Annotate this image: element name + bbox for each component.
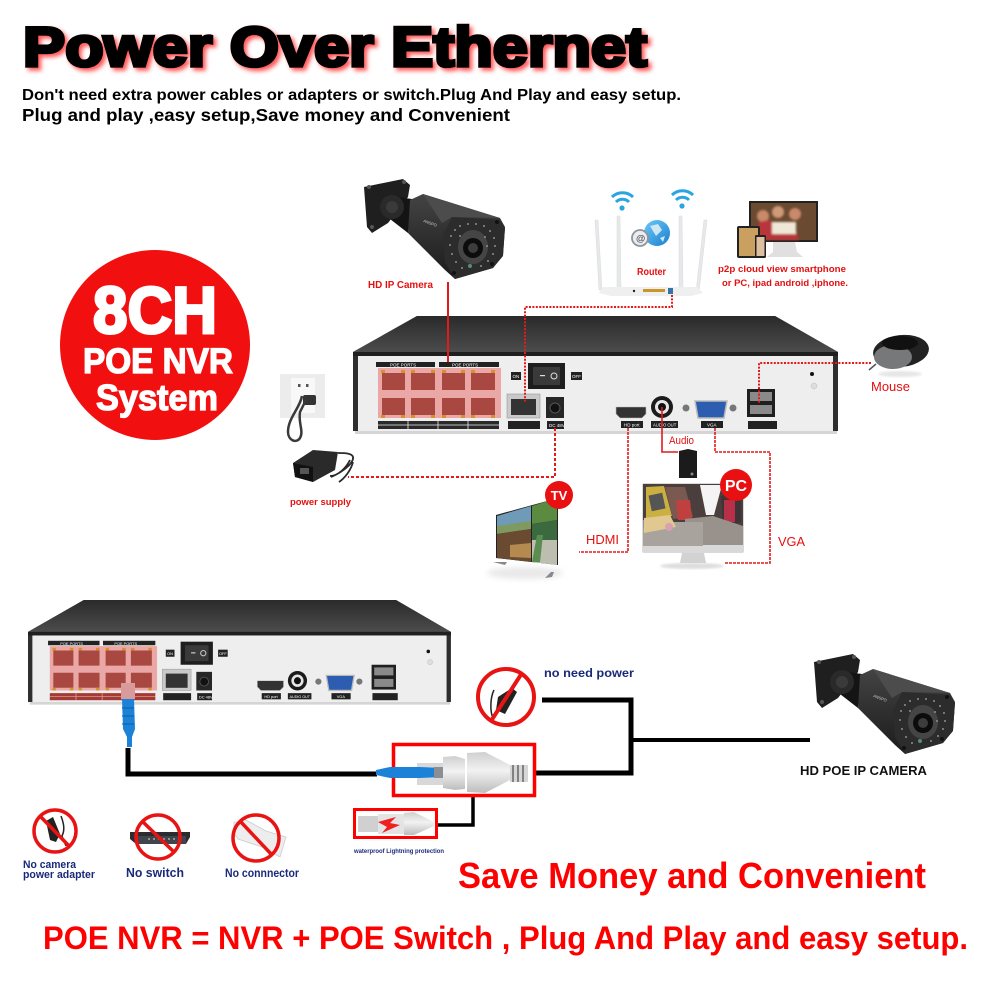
POE ports: POE PORTS bbox=[390, 362, 416, 368]
NVR rear panel: top bbox=[353, 316, 838, 434]
audio port: AUDIO OUT bbox=[653, 422, 677, 428]
icon: HD IP camera bbox=[364, 179, 505, 279]
label: No switch: No switch bbox=[126, 865, 184, 880]
label: p2p cloud text: p2p cloud view smartphone bbox=[718, 264, 846, 275]
power switch bbox=[166, 642, 228, 665]
icon: speaker bbox=[679, 449, 697, 478]
badge: TV bbox=[545, 481, 573, 509]
POE ports: POE PORTS bbox=[452, 362, 478, 368]
LAN port and DC jack: DC 48V bbox=[549, 423, 565, 428]
label: Router: Router bbox=[637, 267, 666, 278]
label: No camera power adapter: No camera bbox=[23, 859, 77, 871]
icon: power adapter bbox=[293, 450, 353, 482]
power switch: ON bbox=[167, 651, 173, 656]
label: power supply: power supply bbox=[290, 497, 352, 508]
USB ports bbox=[372, 665, 398, 700]
HDMI port bbox=[616, 407, 646, 428]
caption: waterproof Lightning protection: waterproof Lightning protection bbox=[353, 849, 444, 855]
VGA port bbox=[682, 401, 736, 428]
badge: 8CH POE NVR System: POE NVR bbox=[83, 342, 233, 381]
label: Mouse: Mouse bbox=[871, 380, 910, 394]
icon: PC monitor bbox=[642, 483, 744, 569]
label: HDMI: HDMI bbox=[586, 532, 619, 547]
icon: HD POE IP camera: ANSPO bbox=[873, 693, 888, 703]
icon: no camera power adapter bbox=[34, 810, 76, 852]
connector lines: red wiring bbox=[348, 282, 871, 563]
icon: mouse bbox=[869, 332, 931, 377]
icon: TV bbox=[487, 498, 563, 579]
power switch: OFF bbox=[219, 651, 227, 656]
subtitle text block: Plug and play ,easy setup,Save money and Convenient bbox=[22, 105, 510, 125]
status LED bbox=[810, 372, 817, 389]
USB ports bbox=[747, 389, 777, 429]
subtitle text block bbox=[22, 87, 681, 125]
blue RJ45 plug in NVR bbox=[121, 683, 135, 747]
audio port: AUDIO OUT bbox=[290, 695, 311, 699]
VGA port: VGA bbox=[337, 694, 345, 699]
badge: TV: TV bbox=[551, 488, 568, 503]
POE ports bbox=[376, 362, 501, 429]
black PoE cable lines bbox=[128, 700, 810, 825]
heading: POE NVR equation: POE NVR = NVR + POE Switch , Plug And Play and easy setup. bbox=[43, 920, 968, 956]
power switch: ON bbox=[512, 374, 519, 379]
power switch bbox=[511, 363, 582, 389]
LAN port and DC jack bbox=[162, 669, 213, 700]
icon: router with wifi bbox=[595, 191, 707, 296]
icon: router with wifi: @ bbox=[636, 234, 645, 244]
title: Power Over Ethernet bbox=[23, 15, 647, 78]
POE ports bbox=[48, 641, 157, 700]
label: No connector: No connnector bbox=[225, 868, 299, 880]
red box: waterproof connector bbox=[376, 744, 534, 796]
heading: Save Money and Convenient: Save Money and Convenient bbox=[458, 855, 926, 896]
power switch: OFF bbox=[572, 374, 581, 379]
label: p2p cloud text bbox=[718, 264, 848, 289]
label: no need power: no need power bbox=[544, 668, 635, 680]
icon: HD POE IP camera bbox=[814, 654, 955, 754]
icon: HD IP camera: ANSPO bbox=[423, 218, 438, 228]
badge: 8CH POE NVR System: 8CH bbox=[93, 273, 217, 347]
label: Audio: Audio bbox=[669, 435, 694, 447]
label: No camera power adapter: power adapter bbox=[23, 869, 96, 881]
LAN port and DC jack: DC 48V bbox=[199, 694, 213, 699]
icon: wall socket and power cable bbox=[280, 374, 325, 441]
VGA port bbox=[315, 675, 362, 699]
HDMI port: HD port bbox=[264, 694, 279, 699]
badge: PC: PC bbox=[725, 478, 748, 495]
red box: lightning protection inset bbox=[354, 810, 436, 838]
label: VGA: VGA bbox=[778, 534, 805, 549]
icon: smartphone, tablet and PC bbox=[737, 201, 818, 258]
chassis bbox=[353, 316, 838, 434]
label: No camera power adapter bbox=[23, 859, 96, 881]
icon: no power adapter bbox=[478, 669, 534, 725]
label: p2p cloud text: or PC, ipad android ,iphone. bbox=[722, 278, 848, 289]
icon: no connector bbox=[233, 815, 286, 861]
chassis bbox=[28, 600, 451, 705]
NVR rear panel: bottom bbox=[28, 600, 451, 705]
status LED bbox=[427, 650, 433, 665]
label: HD POE IP CAMERA: HD POE IP CAMERA bbox=[800, 764, 927, 778]
POE ports: POE PORTS bbox=[60, 641, 83, 646]
HDMI port: HD port bbox=[624, 422, 640, 428]
badge: PC bbox=[720, 469, 752, 501]
badge: 8CH POE NVR System bbox=[60, 250, 250, 440]
VGA port: VGA bbox=[707, 422, 717, 428]
LAN port and DC jack bbox=[507, 394, 565, 429]
badge: 8CH POE NVR System: System bbox=[96, 377, 218, 418]
subtitle text block: Don't need extra power cables or adapters or switch.Plug And Play and easy setup. bbox=[22, 87, 681, 104]
POE ports: POE PORTS bbox=[114, 641, 137, 646]
audio port bbox=[651, 396, 678, 428]
audio port bbox=[288, 671, 311, 699]
HDMI port bbox=[257, 681, 284, 699]
label: HD IP Camera: HD IP Camera bbox=[368, 280, 433, 291]
icon: no switch bbox=[130, 815, 190, 859]
